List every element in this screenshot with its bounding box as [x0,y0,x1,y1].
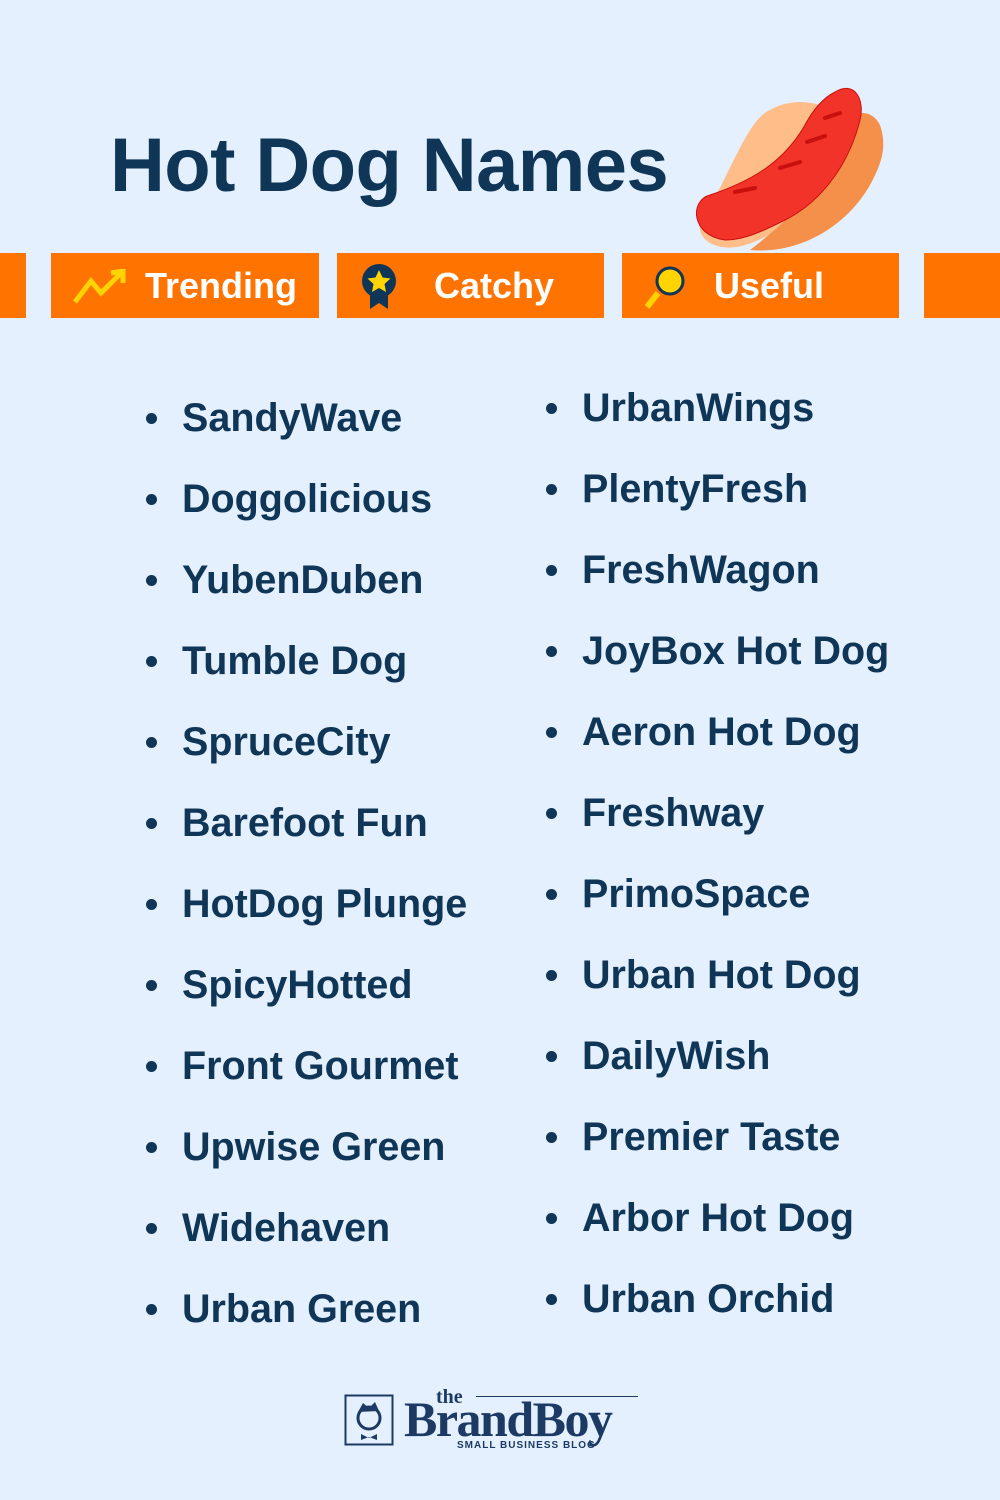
list: left column: SpicyHotted [182,963,412,1007]
list: right column: Urban Orchid [582,1277,834,1321]
list: right column: Arbor Hot Dog [582,1196,854,1240]
icon: hot dog [696,88,884,250]
list: left column: Urban Green [182,1287,421,1331]
icon: badge star [362,264,396,309]
list: right column: PrimoSpace [582,872,810,916]
tab: catchy: Catchy [434,265,554,306]
list: right column: JoyBox Hot Dog [582,629,889,673]
tab: trending [51,253,319,318]
logo: the BrandBoy: the [436,1386,463,1408]
list: right column: Aeron Hot Dog [582,710,861,754]
list: left column: Barefoot Fun [182,801,428,845]
list: right column [546,386,889,1321]
tab: catchy [337,253,604,318]
list: left column: SpruceCity [182,720,391,764]
list: right column: Freshway [582,791,764,835]
list: left column: SandyWave [182,396,402,440]
logo: the BrandBoy: BrandBoy [404,1391,612,1447]
list: right column: UrbanWings [582,386,814,430]
list: left column: Tumble Dog [182,639,407,683]
list: left column: Front Gourmet [182,1044,458,1088]
logo: the BrandBoy [344,1386,638,1451]
list: left column: HotDog Plunge [182,882,467,926]
list: left column: YubenDuben [182,558,423,602]
title: Hot Dog Names [110,123,668,208]
list: left column: Doggolicious [182,477,432,521]
tab: useful: Useful [714,265,824,306]
tab: right stub [924,253,1000,318]
icon: logo boy [344,1394,394,1446]
icon: magnifier [644,266,684,309]
tab: left stub [0,253,26,318]
list: left column [146,396,467,1331]
tab: trending: Trending [145,265,297,306]
list: left column: Widehaven [182,1206,390,1250]
logo: the BrandBoy: SMALL BUSINESS BLOG [457,1440,596,1451]
list: right column: Premier Taste [582,1115,840,1159]
icon: trending arrow [73,269,126,304]
list: right column: Urban Hot Dog [582,953,861,997]
list: left column: Upwise Green [182,1125,445,1169]
tab: useful [622,253,899,318]
list: right column: PlentyFresh [582,467,808,511]
list: right column: DailyWish [582,1034,770,1078]
list: right column: FreshWagon [582,548,820,592]
